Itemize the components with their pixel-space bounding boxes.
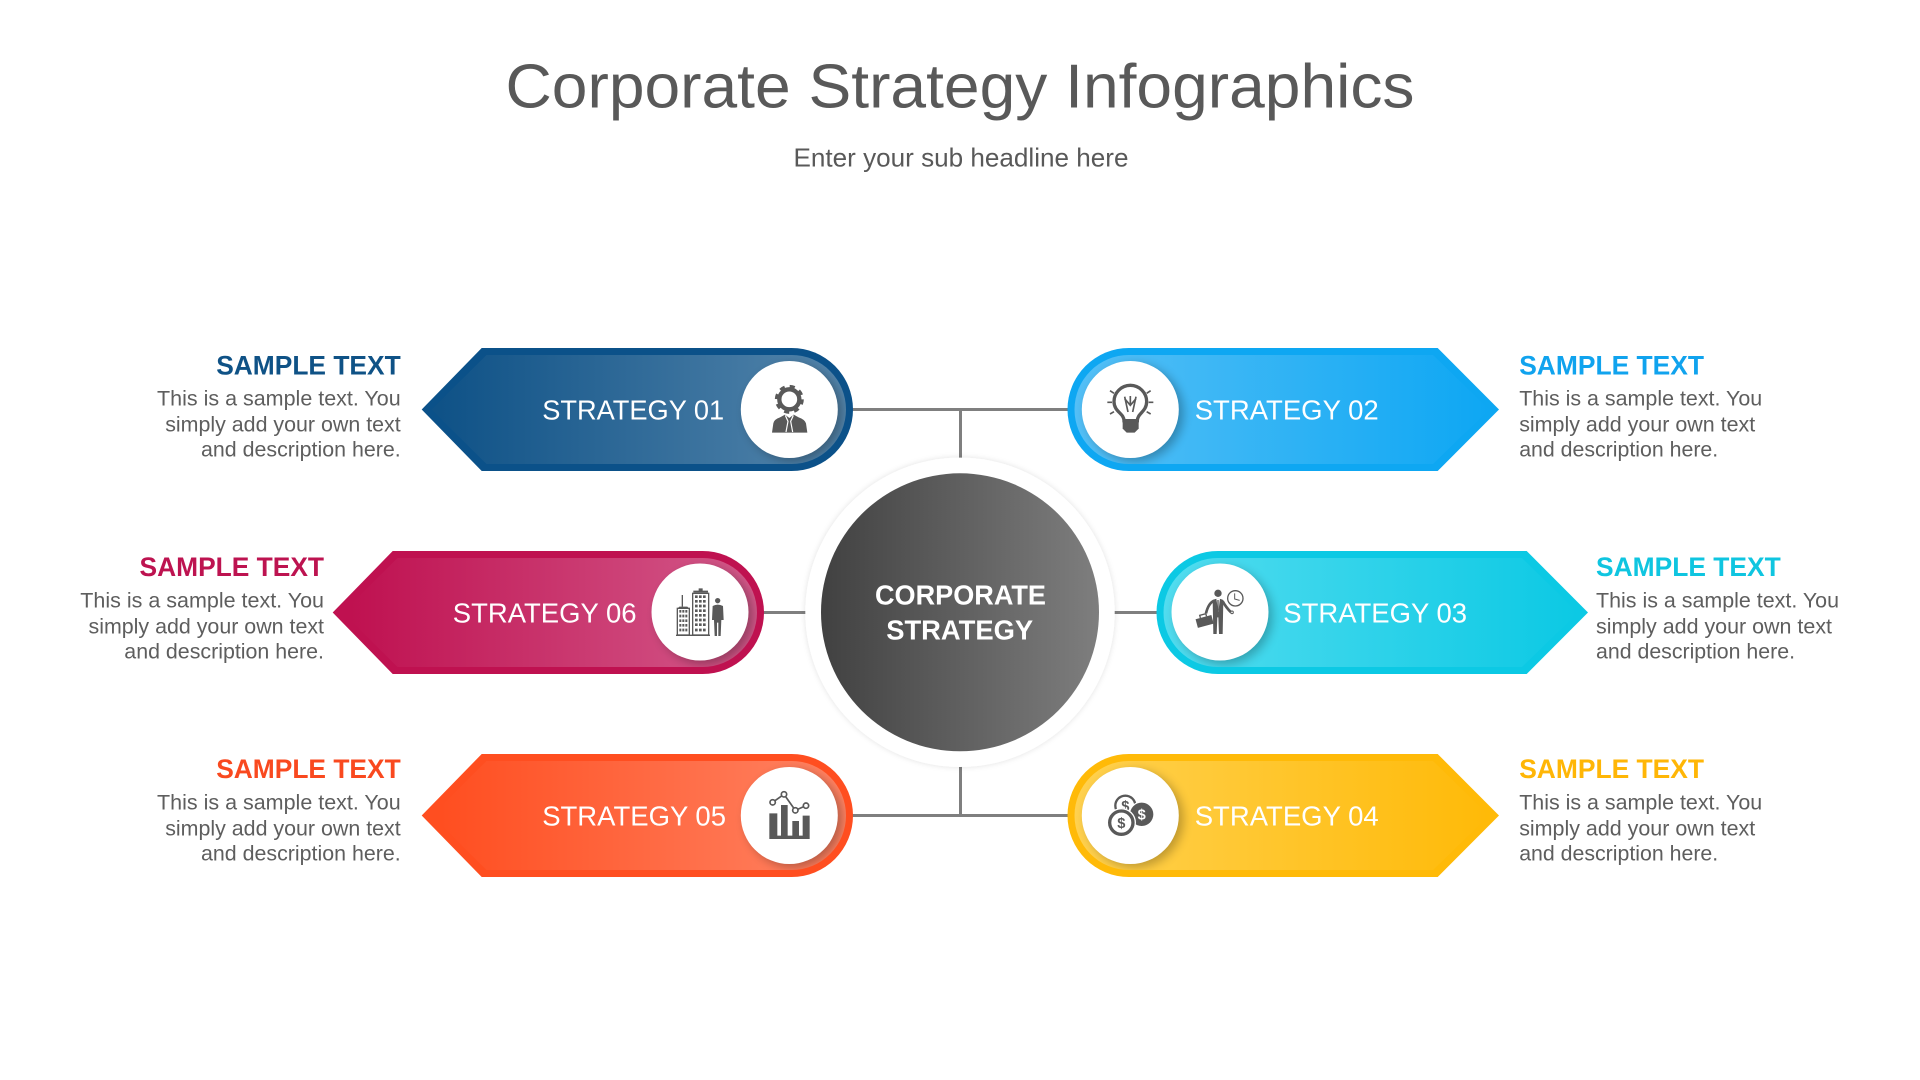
text block: strategy 01: SAMPLE TEXT bbox=[216, 351, 401, 381]
panel: strategy 05: STRATEGY 05 bbox=[542, 800, 726, 831]
text block: strategy 06: SAMPLE TEXT bbox=[140, 552, 324, 582]
text block: strategy 03: This is a sample text. You bbox=[1596, 589, 1839, 613]
text block: strategy 03: simply add your own text bbox=[1596, 614, 1832, 638]
panel: strategy 01 bbox=[422, 348, 853, 471]
text block: strategy 05: SAMPLE TEXT bbox=[216, 754, 401, 784]
title: Corporate Strategy Infographics bbox=[506, 53, 1414, 122]
text block: strategy 02 bbox=[1519, 351, 1762, 462]
icon: bar and line chart bbox=[769, 792, 810, 839]
text block: strategy 04: simply add your own text bbox=[1519, 816, 1755, 840]
icon: coins bbox=[1107, 796, 1155, 837]
text block: strategy 04: SAMPLE TEXT bbox=[1519, 754, 1704, 784]
panel: strategy 01: STRATEGY 01 bbox=[542, 394, 724, 425]
panel: strategy 04: STRATEGY 04 bbox=[1195, 800, 1379, 831]
text block: strategy 04 bbox=[1519, 754, 1762, 866]
text block: strategy 05 bbox=[157, 754, 401, 866]
text block: strategy 06: and description here. bbox=[124, 640, 324, 664]
text block: strategy 05: simply add your own text bbox=[165, 816, 401, 840]
text block: strategy 05: and description here. bbox=[201, 842, 401, 866]
text block: strategy 04: This is a sample text. You bbox=[1519, 791, 1762, 815]
icon: city buildings and person bbox=[676, 588, 724, 636]
icon: coins: $ bbox=[1138, 808, 1146, 824]
text block: strategy 03: SAMPLE TEXT bbox=[1596, 552, 1781, 582]
center circle: corporate strategy bbox=[805, 458, 1115, 767]
text block: strategy 04: and description here. bbox=[1519, 842, 1718, 866]
panel: strategy 06: STRATEGY 06 bbox=[453, 598, 636, 629]
text block: strategy 01 bbox=[157, 351, 401, 462]
text block: strategy 02: and description here. bbox=[1519, 438, 1718, 462]
text block: strategy 01: simply add your own text bbox=[165, 412, 401, 436]
icon: coins: $ bbox=[1121, 799, 1129, 815]
text block: strategy 06 bbox=[80, 552, 324, 664]
text block: strategy 02: simply add your own text bbox=[1519, 412, 1755, 436]
text block: strategy 03: and description here. bbox=[1596, 640, 1795, 664]
text block: strategy 05: This is a sample text. You bbox=[157, 791, 401, 815]
text block: strategy 06: simply add your own text bbox=[88, 614, 324, 638]
connector lines bbox=[762, 410, 1158, 816]
text block: strategy 06: This is a sample text. You bbox=[80, 589, 324, 613]
icon: coins: $ bbox=[1117, 816, 1125, 832]
panel: strategy 03: STRATEGY 03 bbox=[1283, 598, 1467, 629]
text block: strategy 02: This is a sample text. You bbox=[1519, 387, 1762, 411]
panel: strategy 02 bbox=[1068, 348, 1499, 471]
center circle: corporate strategy: CORPORATE bbox=[875, 579, 1046, 610]
text block: strategy 03 bbox=[1596, 552, 1839, 664]
panel: strategy 04 bbox=[1068, 754, 1499, 877]
icon: light bulb bbox=[1107, 385, 1153, 433]
text block: strategy 01: This is a sample text. You bbox=[157, 387, 401, 411]
subtitle: Enter your sub headline here bbox=[794, 143, 1128, 173]
panel: strategy 02: STRATEGY 02 bbox=[1195, 394, 1379, 425]
icon: gear head businessman bbox=[772, 387, 807, 433]
center circle: corporate strategy: STRATEGY bbox=[886, 614, 1034, 645]
icon: businessman with briefcase and clock bbox=[1195, 590, 1243, 634]
text block: strategy 01: and description here. bbox=[201, 438, 401, 462]
panel: strategy 05 bbox=[422, 754, 853, 877]
panel: strategy 03 bbox=[1156, 551, 1588, 674]
text block: strategy 02: SAMPLE TEXT bbox=[1519, 351, 1704, 381]
panel: strategy 06 bbox=[333, 551, 764, 674]
